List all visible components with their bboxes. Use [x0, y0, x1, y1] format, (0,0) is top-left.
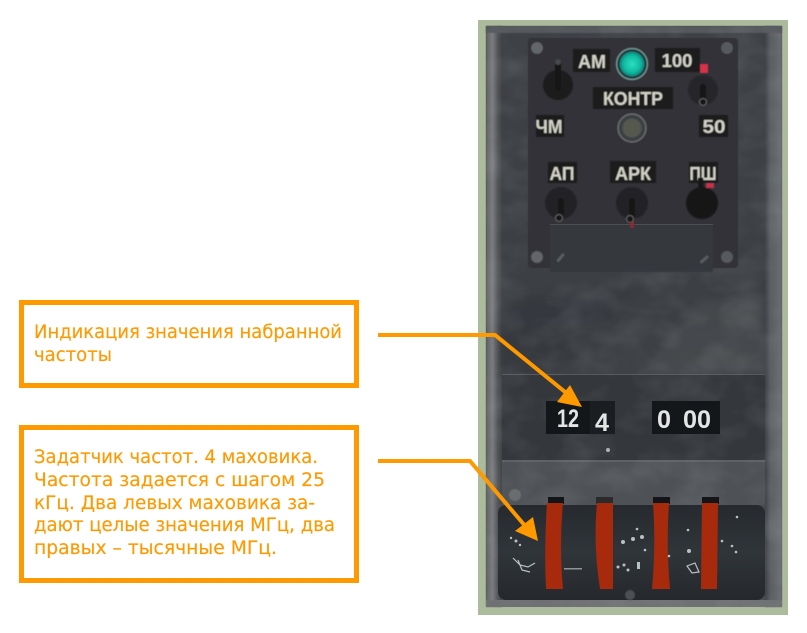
frequency display	[546, 401, 720, 437]
frequency display: 4	[595, 409, 609, 437]
tuning wheels housing	[498, 489, 765, 600]
tuning wheel 2	[596, 497, 613, 589]
label 100	[655, 48, 700, 72]
toggle switch: 100/50	[688, 64, 718, 106]
frequency display: 0	[657, 406, 671, 434]
callout: frequency indication: Индикация значения набранной	[34, 321, 342, 343]
label ЧМ: ЧМ	[536, 117, 562, 137]
toggle switch: АМ/ЧМ	[543, 59, 573, 100]
frequency display: 00	[683, 406, 711, 434]
label 50	[699, 115, 728, 137]
label ПШ: ПШ	[690, 164, 716, 184]
callout: frequency setter: правых – тысячные МГц.	[34, 537, 277, 559]
paint chips	[510, 516, 738, 573]
callout: frequency indication	[22, 302, 356, 386]
label АМ: АМ	[578, 52, 606, 72]
callout: frequency setter: кГц. Два левых маховика за-	[34, 492, 315, 514]
label АМ	[573, 49, 610, 72]
callout: frequency setter: Задатчик частот. 4 маховика.	[34, 446, 318, 468]
label КОНТР: КОНТР	[603, 89, 663, 109]
toggle switch: ПШ	[686, 178, 718, 219]
arrow: to frequency display	[378, 335, 582, 407]
indicator lamp: green	[616, 48, 648, 80]
callout: frequency indication: частоты	[34, 344, 112, 366]
label АРК: АРК	[615, 164, 652, 184]
callout: frequency setter: Частота задается с шагом 25	[34, 469, 325, 491]
radio control panel image	[478, 20, 788, 615]
toggle switch: АРК	[616, 187, 648, 228]
tuning wheel 3	[652, 497, 670, 589]
frequency band	[502, 374, 765, 505]
callout: frequency setter: дают целые значения МГц, два	[34, 514, 335, 536]
upper control plate	[528, 38, 738, 272]
label 50: 50	[702, 117, 726, 137]
label 100: 100	[662, 51, 692, 71]
callout: frequency setter	[22, 428, 356, 580]
label АРК	[610, 161, 656, 184]
toggle switch: АП	[545, 187, 577, 222]
indicator lamp: control	[618, 114, 646, 142]
tuning wheel 1	[545, 497, 564, 589]
label КОНТР	[593, 87, 673, 109]
label АП: АП	[550, 164, 574, 184]
arrow: to tuning wheels	[378, 461, 538, 541]
tuning wheel 4	[701, 497, 719, 589]
frequency display: 12	[557, 405, 579, 433]
